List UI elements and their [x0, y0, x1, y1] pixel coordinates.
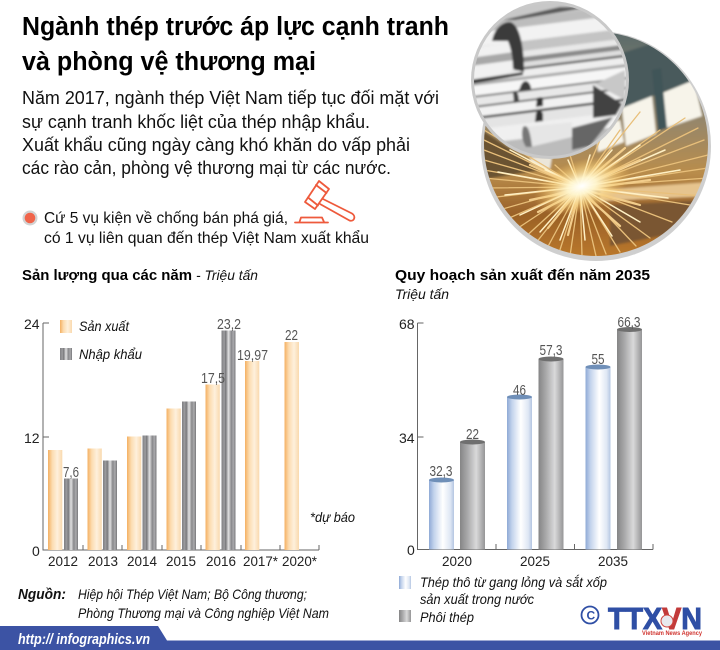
cylinder chart: 34 — [399, 430, 415, 446]
year labels — [48, 553, 318, 569]
year labels: 2020 — [442, 553, 472, 569]
legend — [60, 318, 142, 362]
year labels: 2016 — [206, 553, 236, 569]
year labels: 2014 — [127, 553, 157, 569]
photo collage: sparks and steel pipes — [451, 0, 712, 261]
source note: Phòng Thương mại và Công nghiệp Việt Nam — [78, 605, 329, 621]
logo: TTXVN — [582, 601, 702, 637]
cylinder chart: 68 — [399, 316, 415, 332]
left tube — [474, 42, 516, 78]
panel: production by year — [22, 267, 355, 569]
legend: Thép thô từ gang lỏng và sắt xốp — [420, 574, 607, 590]
dark tube opening — [492, 22, 524, 72]
year labels: 2012 — [48, 553, 78, 569]
cylinder chart: 0 — [407, 542, 415, 558]
intro text: Năm 2017, ngành thép Việt Nam tiếp tục đối mặt với — [22, 87, 439, 108]
top shadow — [503, 7, 590, 20]
copyright mark: C — [586, 608, 596, 622]
year labels: 2015 — [166, 553, 196, 569]
heading: Sản lượng qua các năm — [22, 267, 192, 284]
legend: sản xuất trong nước — [420, 591, 534, 607]
year labels: 2035 — [598, 553, 628, 569]
title: và phòng vệ thương mại — [22, 48, 316, 76]
source note: Nguồn: — [18, 586, 66, 603]
value labels: 23,2 — [217, 317, 241, 333]
wordmark: TTXVN — [608, 601, 702, 636]
cylinders — [429, 327, 642, 550]
note: forecast: *dự báo — [310, 509, 355, 525]
intro text: các rào cản, phòng vệ thương mại từ các nước. — [22, 157, 391, 178]
value labels: 46 — [513, 383, 526, 399]
bar chart: 12 — [24, 430, 40, 446]
value labels — [430, 315, 640, 480]
bars — [48, 330, 299, 550]
source note: Hiệp hội Thép Việt Nam; Bộ Công thương; — [78, 586, 307, 602]
callout text — [44, 210, 369, 247]
legend — [399, 574, 607, 625]
callout: lawsuit statistic — [22, 181, 369, 247]
bar chart — [24, 316, 355, 569]
year labels: 2025 — [520, 553, 550, 569]
title: Ngành thép trước áp lực cạnh tranh — [22, 13, 449, 41]
value labels: 57,3 — [540, 343, 562, 359]
footer band with URL: http:// infographics.vn — [18, 631, 150, 648]
value labels — [63, 317, 298, 481]
intro text: Xuất khẩu cũng ngày càng khó khăn do vấp phải — [22, 134, 410, 155]
lower tube — [529, 124, 574, 147]
photo: steel pipes — [471, 1, 629, 159]
tagline: Vietnam News Agency — [642, 630, 702, 637]
unit label: Triệu tấn — [395, 286, 449, 302]
legend: Nhập khẩu — [79, 346, 142, 362]
square tube — [593, 85, 622, 118]
small tube ends — [518, 81, 531, 91]
metal bands — [474, 10, 626, 156]
source note — [18, 586, 329, 621]
value labels: 55 — [592, 352, 604, 368]
year labels: 2017* — [243, 553, 279, 569]
year labels — [442, 553, 628, 569]
unit label: - Triệu tấn — [196, 267, 258, 283]
callout text: Cứ 5 vụ kiện về chống bán phá giá, — [44, 210, 288, 227]
panel: production plan to 2035 — [395, 267, 653, 625]
callout text: có 1 vụ liên quan đến thép Việt Nam xuất khẩu — [44, 230, 369, 247]
intro text — [22, 87, 439, 178]
year labels: 2013 — [88, 553, 118, 569]
heading: Quy hoạch sản xuất đến năm 2035 — [395, 267, 650, 284]
value labels: 19,97 — [237, 348, 268, 364]
value labels: 22 — [285, 328, 298, 344]
globe — [661, 615, 673, 627]
value labels: 17,5 — [201, 371, 225, 387]
bar chart: 24 — [24, 316, 40, 332]
photo: welding sparks — [480, 25, 712, 261]
value labels: 7,6 — [63, 465, 79, 481]
intro text: sự cạnh tranh khốc liệt của thép nhập khẩu. — [22, 111, 370, 132]
cylinder chart — [399, 315, 653, 569]
title — [22, 13, 449, 76]
icon: gavel — [295, 181, 354, 222]
bar chart: 0 — [32, 543, 40, 559]
legend: Phôi thép — [420, 609, 474, 625]
legend: Sản xuất — [79, 318, 130, 334]
footer band with URL — [0, 626, 720, 650]
value labels: 22 — [466, 427, 479, 443]
value labels: 66,3 — [618, 315, 640, 331]
year labels: 2020* — [282, 553, 318, 569]
value labels: 32,3 — [430, 464, 452, 480]
bullet dot — [22, 210, 38, 226]
